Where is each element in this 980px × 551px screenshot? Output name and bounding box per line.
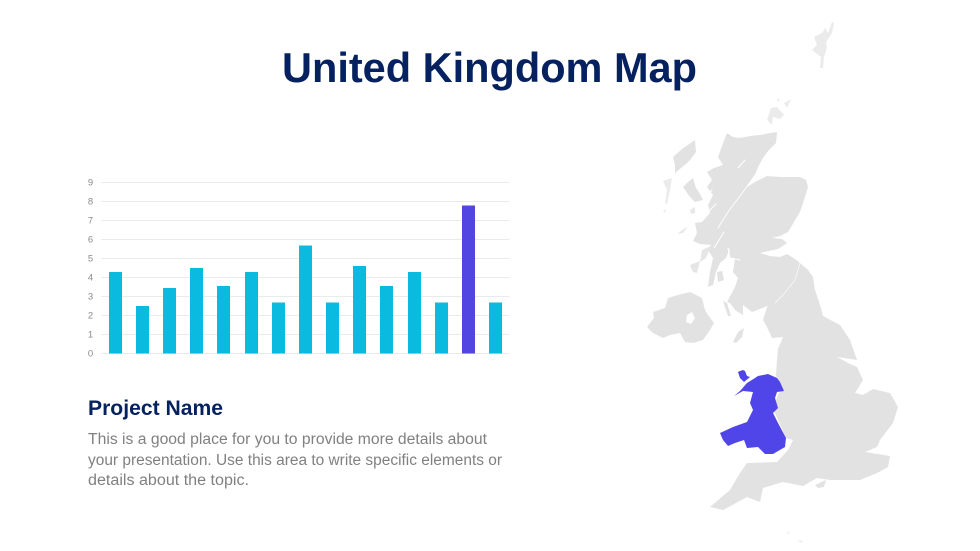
map region: Orkney (767, 98, 791, 125)
axis labels: 1 (88, 330, 93, 340)
map detail: Great Glen, lochs and border (707, 160, 800, 303)
title: United Kingdom Map (282, 44, 697, 91)
map region: Skye (683, 178, 703, 202)
body text: details about the topic. (88, 472, 249, 489)
map region: Jura and Islay (690, 246, 711, 273)
heading: project name: Project Name (88, 397, 223, 420)
axis labels: 2 (88, 310, 93, 322)
map region: Arran (717, 271, 724, 282)
map region: Isles of Scilly (786, 531, 803, 543)
axis labels: 5 (88, 254, 93, 264)
bars (109, 206, 502, 354)
axis labels: 0 (88, 348, 93, 360)
map region: Isle of Man (733, 328, 744, 343)
axis labels: 9 (88, 178, 93, 188)
axis labels: 7 (88, 216, 93, 226)
map region: Isle of Wight (815, 480, 826, 488)
axis labels: 3 (88, 292, 93, 302)
map region: Wales (highlighted) (720, 370, 786, 454)
axis labels: 4 (88, 272, 93, 284)
axis labels (88, 178, 93, 360)
body text (88, 431, 502, 489)
body text: your presentation. Use this area to write specific elements or (88, 452, 502, 469)
map region: Shetland (812, 22, 834, 68)
map region: Northern Ireland (647, 292, 714, 343)
map region: Mull (677, 207, 695, 234)
map: United Kingdom (647, 22, 898, 543)
axis labels: 6 (88, 234, 93, 246)
map region: Uists (663, 178, 672, 213)
bar chart (88, 178, 509, 360)
map region: Rhins (723, 301, 731, 316)
map region: Great Britain (693, 132, 898, 510)
axis labels: 8 (88, 196, 93, 208)
map region: Lewis and Harris (673, 140, 696, 173)
body text: This is a good place for you to provide more details about (88, 431, 488, 448)
